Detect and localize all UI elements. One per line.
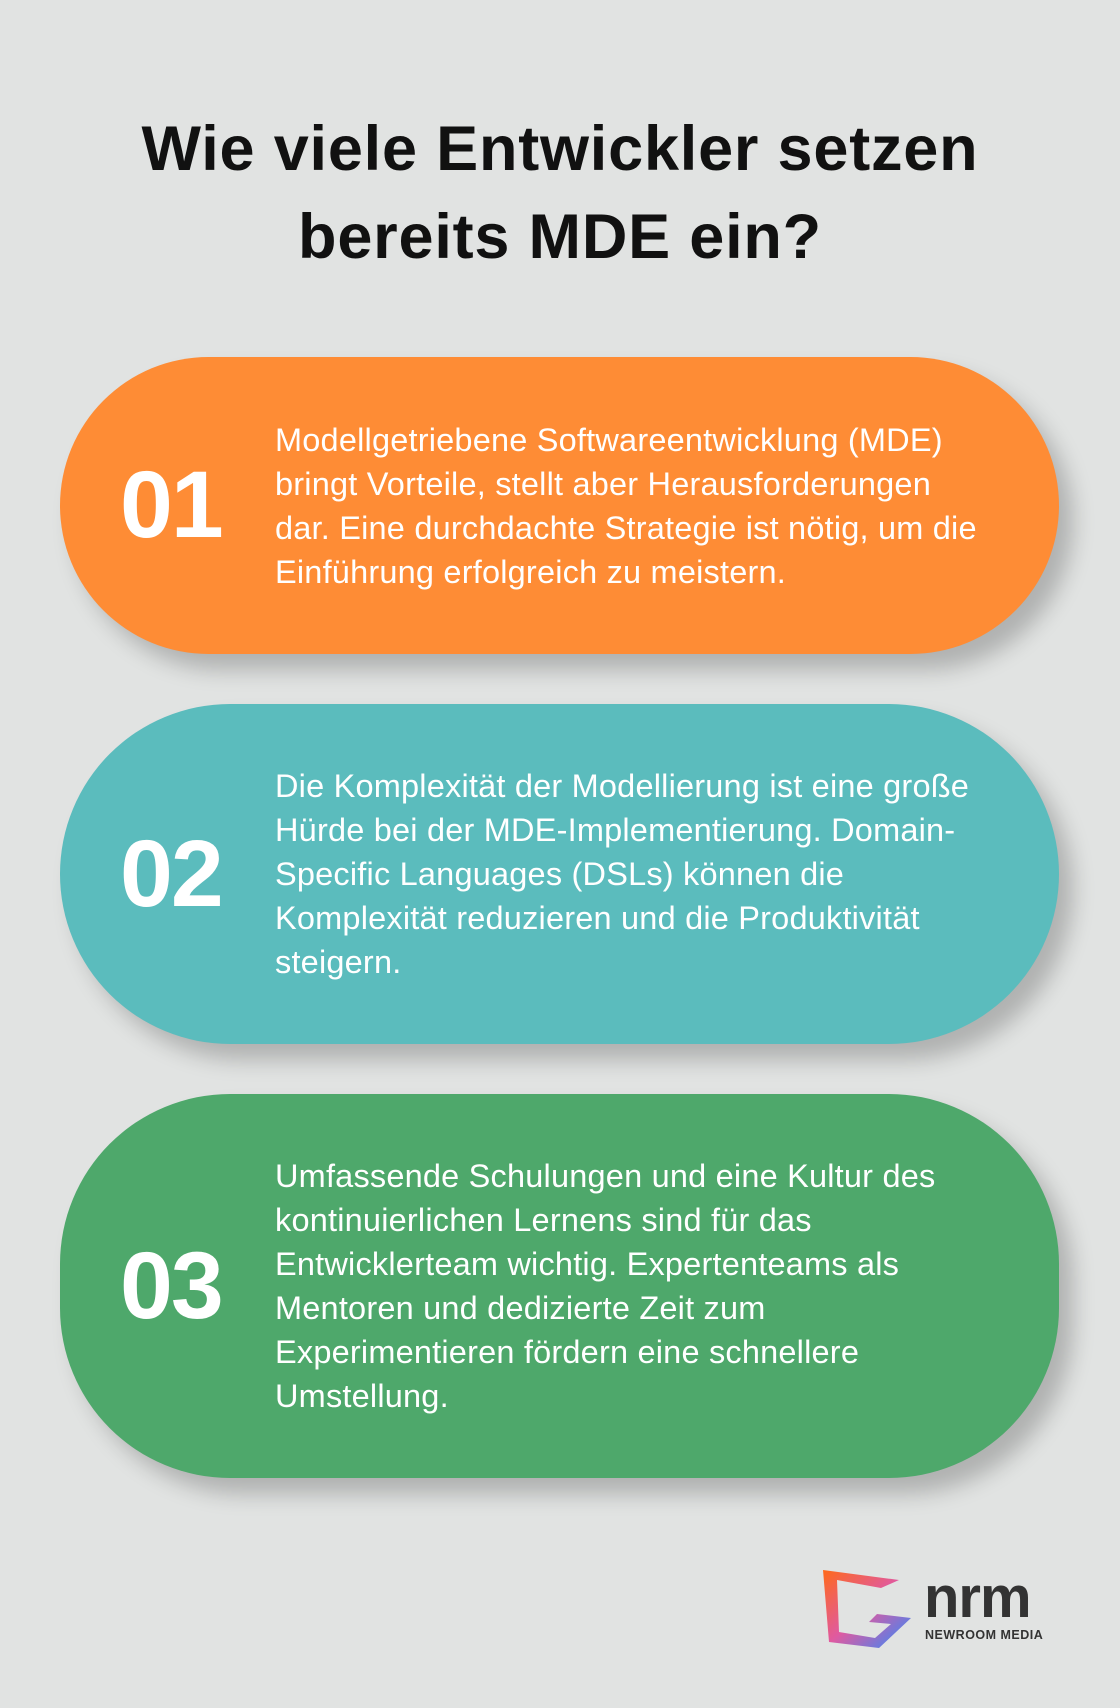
text 03: Experimentieren fördern eine schnellere [275, 1334, 859, 1370]
number 03: 03 [120, 1232, 222, 1338]
logo [823, 1565, 1043, 1648]
text 01: bringt Vorteile, stellt aber Herausforderungen [275, 466, 931, 502]
title [142, 114, 978, 272]
text 03: Umfassende Schulungen und eine Kultur des [275, 1158, 935, 1194]
text 01: Modellgetriebene Softwareentwicklung (MDE) [275, 422, 943, 458]
text 01 [275, 422, 977, 590]
logo: NEWROOM MEDIA [925, 1628, 1043, 1642]
text 03: kontinuierlichen Lernens sind für das [275, 1202, 812, 1238]
title: bereits MDE ein? [298, 202, 822, 272]
text 02: Komplexität reduzieren und die Produktivität [275, 900, 920, 936]
text 02: steigern. [275, 944, 401, 980]
icon: logo mark [823, 1570, 911, 1648]
text 03: Umstellung. [275, 1378, 449, 1414]
text 02 [275, 768, 969, 980]
text 03: Entwicklerteam wichtig. Expertenteams als [275, 1246, 899, 1282]
panel: 01 [60, 357, 1059, 654]
panel: 02 [60, 704, 1059, 1044]
text 01: Einführung erfolgreich zu meistern. [275, 554, 786, 590]
panel: 03 [60, 1094, 1059, 1478]
title: Wie viele Entwickler setzen [142, 114, 978, 184]
text 03: Mentoren und dedizierte Zeit zum [275, 1290, 766, 1326]
text 02: Die Komplexität der Modellierung ist eine große [275, 768, 969, 804]
text 03 [275, 1158, 935, 1414]
number 02: 02 [120, 820, 222, 926]
number 01: 01 [120, 452, 222, 558]
text 02: Hürde bei der MDE-Implementierung. Domain- [275, 812, 955, 848]
text 02: Specific Languages (DSLs) können die [275, 856, 844, 892]
text 01: dar. Eine durchdachte Strategie ist nötig, um die [275, 510, 977, 546]
logo text: nrm [924, 1565, 1031, 1630]
